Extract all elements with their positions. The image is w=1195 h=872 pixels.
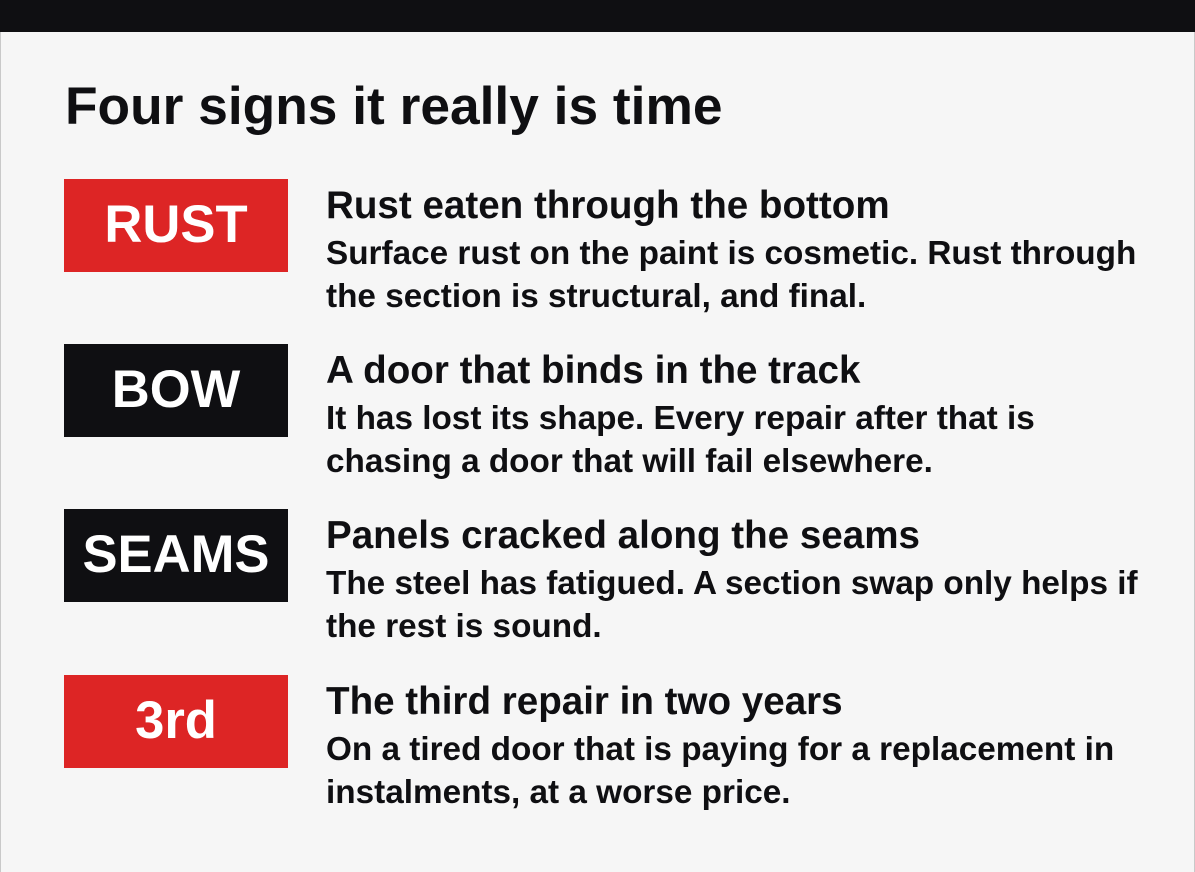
- text: rust description: Surface rust on the paint is cosmetic. Rust through: [326, 235, 1136, 272]
- panel: third repair sign: [64, 675, 1114, 811]
- heading: rust: Rust eaten through the bottom: [326, 184, 890, 227]
- text: seams description: The steel has fatigued. A section swap only helps if: [326, 565, 1138, 602]
- text: rust description: [326, 235, 1136, 315]
- tag: 3rd: 3rd: [135, 691, 217, 750]
- tag: RUST: RUST: [104, 195, 248, 254]
- top bar: [0, 0, 1195, 32]
- text: third repair description: On a tired door that is paying for a replacement in: [326, 731, 1114, 768]
- text: bow description: chasing a door that will fail elsewhere.: [326, 443, 933, 480]
- text: third repair description: instalments, at a worse price.: [326, 774, 790, 811]
- panel: seams sign: [64, 509, 1138, 645]
- tag: 3rd: [64, 675, 288, 768]
- heading: third repair: The third repair in two years: [326, 680, 843, 723]
- tag: BOW: BOW: [112, 360, 240, 419]
- panel: bow sign: [64, 344, 1035, 480]
- panel: rust sign: [64, 179, 1136, 315]
- tag: SEAMS: SEAMS: [82, 525, 270, 584]
- text: seams description: [326, 565, 1138, 645]
- heading: seams: Panels cracked along the seams: [326, 514, 920, 557]
- text: bow description: It has lost its shape. Every repair after that is: [326, 400, 1035, 437]
- text: third repair description: [326, 731, 1114, 811]
- text: seams description: the rest is sound.: [326, 608, 602, 645]
- tag: RUST: [64, 179, 288, 272]
- heading: bow: A door that binds in the track: [326, 349, 860, 392]
- text: bow description: [326, 400, 1035, 480]
- tag: BOW: [64, 344, 288, 437]
- text: rust description: the section is structural, and final.: [326, 278, 866, 315]
- tag: SEAMS: [64, 509, 288, 602]
- title: Four signs it really is time: [65, 77, 723, 136]
